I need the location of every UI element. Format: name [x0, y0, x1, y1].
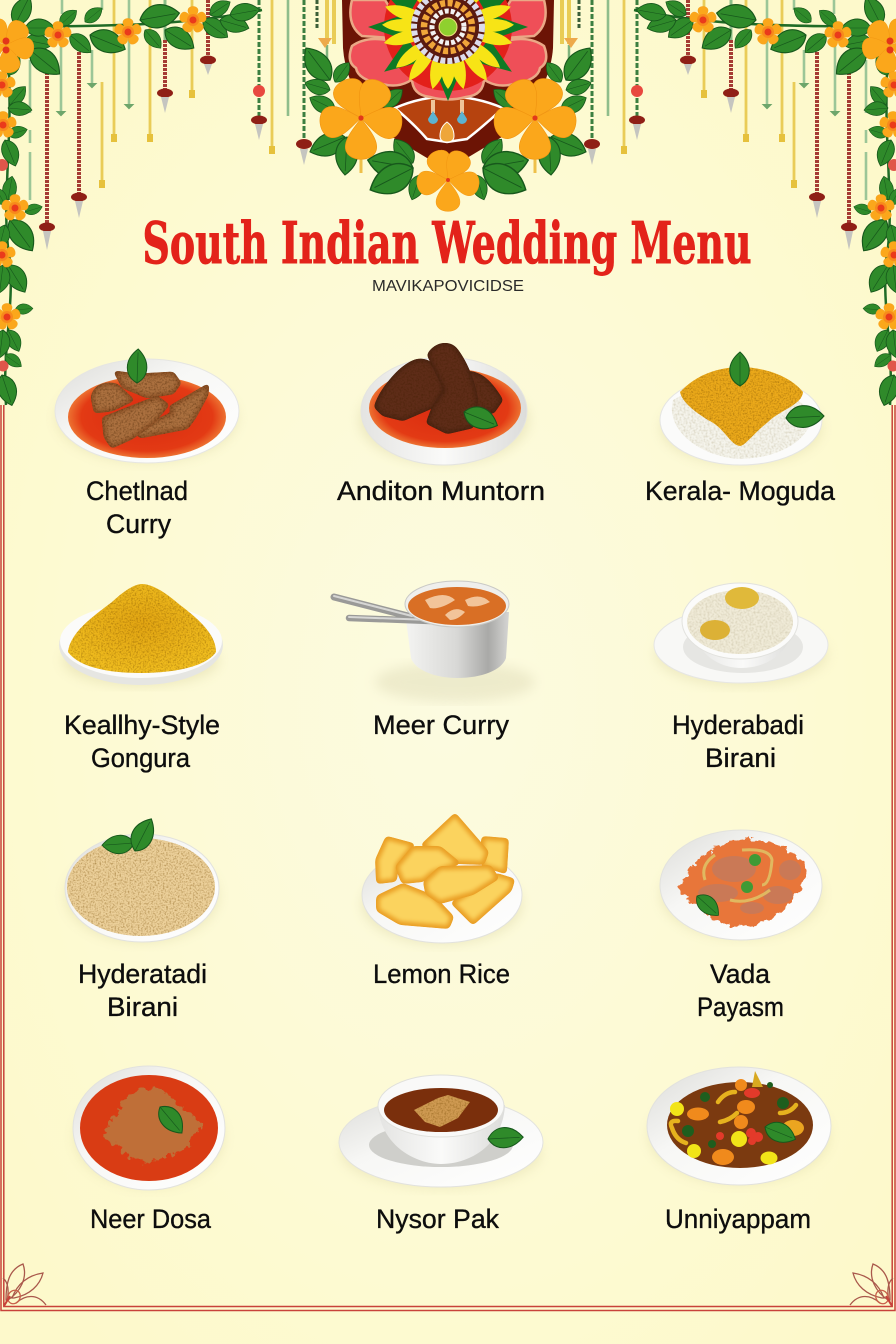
dish: Meer Curry — [334, 581, 535, 740]
flower and leaf cluster, right — [469, 42, 600, 203]
label — [86, 476, 188, 539]
plate of pale rice with leaves — [65, 814, 219, 942]
red double border frame — [1, 405, 895, 1310]
label: Payasm — [697, 992, 784, 1022]
green and yellow sun rays — [368, 0, 528, 101]
dish: Lemon Rice — [362, 815, 522, 989]
label — [672, 710, 804, 773]
label: Curry — [106, 509, 171, 539]
bowl with dark meat — [359, 344, 529, 465]
mandala rings — [411, 0, 485, 64]
label: Nysor Pak — [376, 1204, 499, 1234]
label: Birani — [107, 992, 178, 1022]
plate of rice with yellow heap — [660, 352, 824, 465]
bowl of payasam on plate — [654, 583, 828, 686]
plate of orange rice with meat — [660, 830, 822, 940]
subtitle: MAVIKAPOVICIDSE — [372, 278, 524, 295]
label: Lemon Rice — [373, 959, 510, 989]
dish: Hyderatadi Birani — [65, 814, 219, 1022]
dish: Nysor Pak — [339, 1075, 543, 1234]
top left garland with hanging strands — [0, 0, 275, 408]
label — [78, 959, 207, 1022]
pink petal panels — [350, 0, 546, 100]
label: Neer Dosa — [90, 1204, 212, 1234]
red sunburst ground — [384, 0, 512, 91]
plate of vegetable stew — [647, 1067, 831, 1185]
label: Hyderabadi — [672, 710, 804, 740]
central kolam mandala ornament — [342, 0, 554, 170]
label: Vada — [710, 959, 771, 989]
hanging jewels — [428, 100, 467, 142]
bowl of brown soup on plate — [339, 1075, 543, 1188]
plate with yellow heap — [59, 584, 223, 686]
vine leaves — [0, 0, 261, 408]
dish: Keallhy-Style Gongura — [59, 584, 223, 773]
label: Keallhy-Style — [64, 710, 220, 740]
label: Chetlnad — [86, 476, 188, 506]
plate with curry pieces — [55, 349, 239, 463]
label: Anditon Muntorn — [337, 476, 545, 506]
plate of red curry — [73, 1066, 225, 1190]
dish: Chetlnad Curry — [55, 349, 239, 539]
label: Hyderatadi — [78, 959, 207, 989]
lower brown panel with white outline — [395, 96, 503, 142]
center top strands — [288, 0, 608, 165]
label: Birani — [705, 743, 776, 773]
saucepan with handles — [334, 581, 535, 702]
label: Unniyappam — [665, 1204, 811, 1234]
dish: Anditon Muntorn — [337, 344, 545, 506]
top right garland with hanging strands — [621, 0, 896, 408]
hanging strands — [30, 0, 272, 224]
dish: Unniyappam — [647, 1067, 831, 1234]
dish: Kerala- Moguda — [645, 352, 836, 506]
dish: Neer Dosa — [73, 1066, 225, 1234]
maroon shield — [342, 0, 554, 170]
label: Meer Curry — [373, 710, 510, 740]
plate of golden pieces — [362, 815, 522, 944]
garland flowers — [0, 6, 208, 371]
corner floral outline, bottom left — [3, 1264, 46, 1306]
label: Gongura — [91, 743, 191, 773]
label — [697, 959, 784, 1022]
label — [64, 710, 220, 773]
top vine — [5, 10, 262, 405]
label: Kerala- Moguda — [645, 476, 836, 506]
flower and leaf cluster, left — [296, 42, 427, 203]
dish: Vada Payasm — [660, 830, 822, 1022]
dish: Hyderabadi Birani — [654, 583, 828, 773]
bottom center flower — [415, 147, 481, 211]
corner floral outline, bottom right — [850, 1264, 893, 1306]
strand tips — [39, 56, 275, 250]
